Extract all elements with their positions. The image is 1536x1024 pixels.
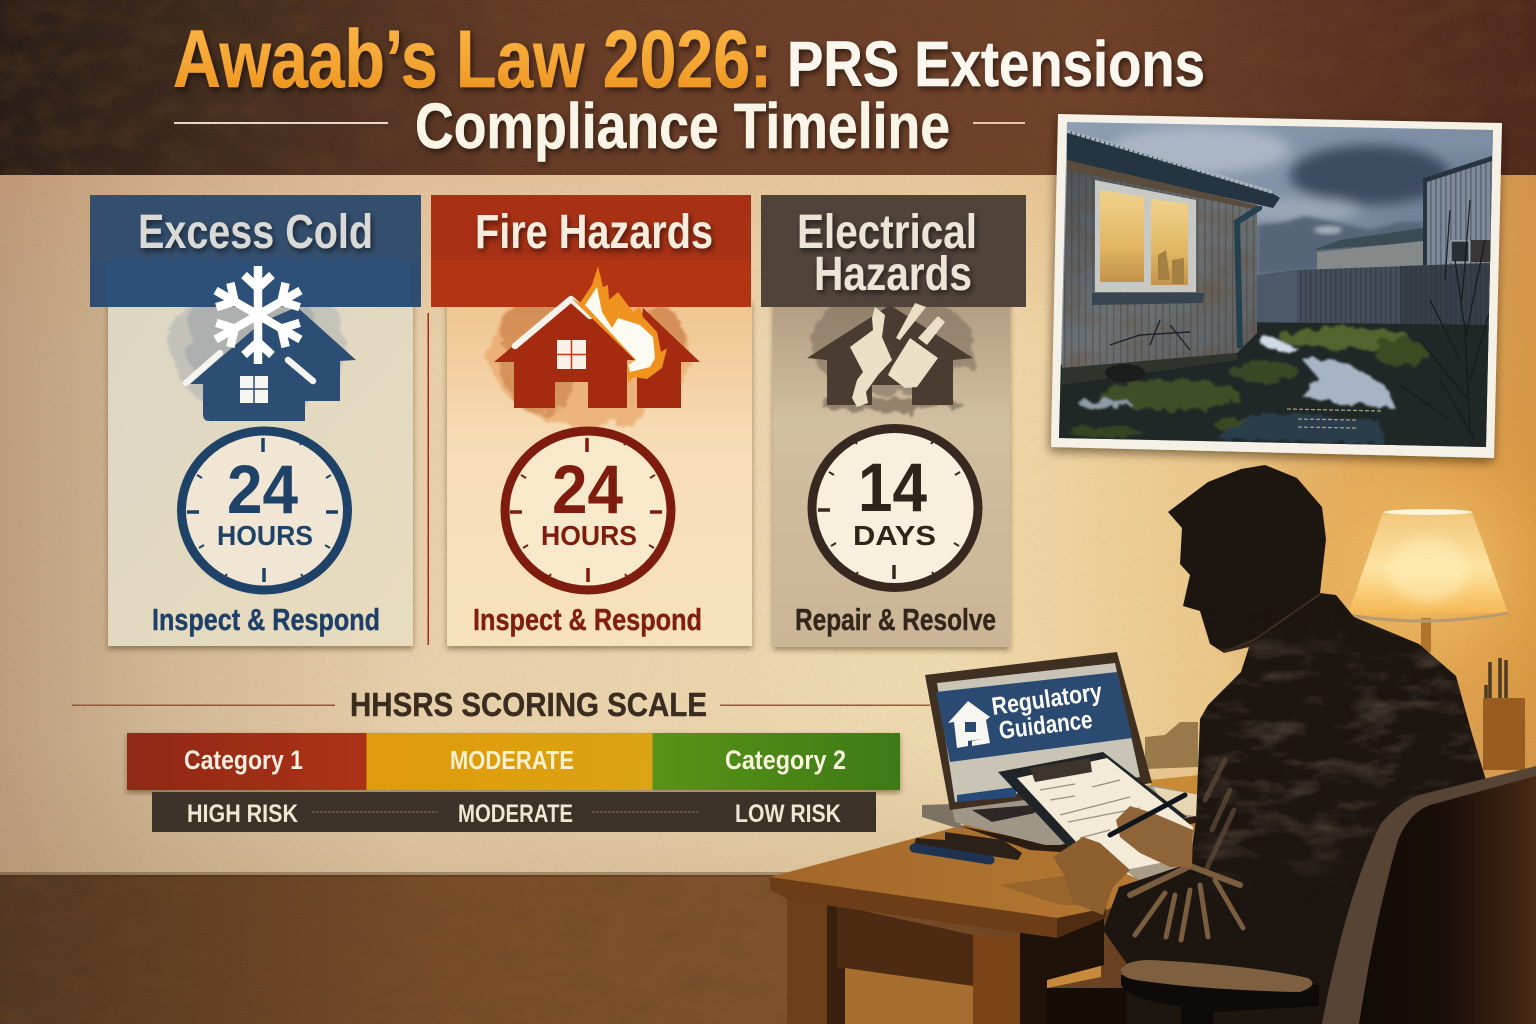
hands and pen bbox=[1053, 795, 1193, 915]
label: Inspect and Respond: Inspect & Respond bbox=[473, 602, 702, 637]
photo scene bbox=[1050, 115, 1510, 455]
header: Electrical Hazards bbox=[761, 195, 1026, 307]
chart: risk level bar: HIGH RISK bbox=[187, 800, 298, 828]
title rule right bbox=[973, 122, 1025, 124]
holding hand bbox=[1053, 837, 1130, 915]
title rule left bbox=[174, 122, 388, 124]
icon halo bbox=[170, 271, 346, 419]
header: Excess Cold: Excess Cold bbox=[138, 206, 373, 259]
clock: 24 hours: 24 bbox=[552, 451, 623, 528]
chart: risk level bar: MODERATE bbox=[458, 800, 573, 828]
chair back frame bbox=[1322, 766, 1536, 1024]
desk pens and phone bbox=[914, 832, 1022, 860]
divider: red rule bbox=[428, 313, 429, 645]
chair seat bbox=[1121, 975, 1319, 1024]
scene: person at desk bbox=[770, 465, 1536, 1024]
chart: HHSRS category bar: MODERATE bbox=[450, 745, 574, 775]
writing hand bbox=[1116, 806, 1193, 867]
icon: flame bbox=[571, 266, 667, 383]
desk top bbox=[770, 778, 1200, 918]
photo frame bbox=[1051, 114, 1502, 458]
papers on desk bbox=[1145, 722, 1198, 769]
title bbox=[173, 14, 1205, 162]
laptop screen text line 2: Guidance bbox=[997, 706, 1094, 745]
clock: 14 days: 14 bbox=[858, 449, 927, 526]
panel: Electrical Hazards bbox=[761, 195, 1026, 647]
icon: house with snowflake bbox=[186, 266, 356, 421]
icon: house on fire bbox=[494, 266, 700, 408]
laptop bbox=[922, 652, 1200, 852]
clock: 24 hours bbox=[182, 431, 348, 590]
clock: 14 days: DAYS bbox=[853, 520, 936, 551]
person silhouette bbox=[1103, 465, 1490, 1024]
icon halo bbox=[810, 295, 974, 410]
panel: Fire Hazards bbox=[431, 195, 752, 646]
chart: risk level bar: LOW RISK bbox=[735, 800, 841, 828]
icon: snowflake bbox=[209, 266, 307, 364]
laptop screen text: Regulatory bbox=[990, 678, 1104, 721]
header: Electrical Hazards: Hazards bbox=[814, 248, 972, 301]
label: Repair and Resolve: Repair & Resolve bbox=[795, 602, 996, 637]
chart: HHSRS category bar bbox=[127, 733, 900, 790]
pencil holder bbox=[1483, 658, 1525, 770]
clock: 24 hours: HOURS bbox=[217, 520, 313, 551]
chart: risk level bar bbox=[152, 792, 876, 832]
laptop screen icon: house bbox=[948, 701, 990, 748]
icon: house with electrical plugs bbox=[807, 303, 973, 407]
card body bbox=[773, 300, 1010, 647]
title line 1 gold: Awaab’s Law 2026: bbox=[173, 14, 772, 105]
title line 2: Compliance Timeline bbox=[415, 90, 950, 162]
clock: 14 days bbox=[812, 428, 978, 588]
lamp bbox=[1348, 509, 1508, 652]
icon halo bbox=[490, 283, 690, 427]
card body bbox=[447, 300, 752, 646]
desk bbox=[770, 775, 1200, 1024]
heading: HHSRS scoring scale: HHSRS SCORING SCALE bbox=[350, 686, 707, 723]
header: Fire Hazards: Fire Hazards bbox=[475, 206, 713, 259]
label: Inspect and Respond: Inspect & Respond bbox=[152, 602, 380, 637]
chart: HHSRS category bar: Category 1 bbox=[184, 745, 303, 775]
clock: 24 hours: HOURS bbox=[541, 520, 637, 551]
clipboard bbox=[998, 752, 1193, 885]
chair back cushion bbox=[1359, 776, 1536, 1024]
clock: 24 hours bbox=[505, 431, 671, 590]
photo: damp house in winter bbox=[1050, 114, 1510, 458]
pen bbox=[1110, 795, 1185, 835]
background: lower brown band bbox=[0, 872, 1536, 1024]
background: parchment wall bbox=[0, 175, 1536, 876]
chair bbox=[1121, 766, 1536, 1024]
header: Excess Cold bbox=[90, 195, 421, 307]
card body bbox=[108, 300, 413, 646]
title line 1 white: PRS Extensions bbox=[787, 28, 1205, 100]
panel: Excess Cold bbox=[90, 195, 421, 646]
chair armrest bbox=[1121, 960, 1312, 992]
desk legs and apron bbox=[787, 896, 1187, 1024]
header: Fire Hazards bbox=[431, 195, 751, 307]
icon: right plug bbox=[888, 303, 945, 388]
chart: HHSRS category bar: Category 2 bbox=[725, 745, 846, 775]
icon: left plug bbox=[850, 307, 892, 407]
background: upper brown band bbox=[0, 0, 1536, 176]
header: Electrical Hazards: Electrical bbox=[797, 206, 977, 259]
clock: 24 hours: 24 bbox=[227, 451, 298, 528]
